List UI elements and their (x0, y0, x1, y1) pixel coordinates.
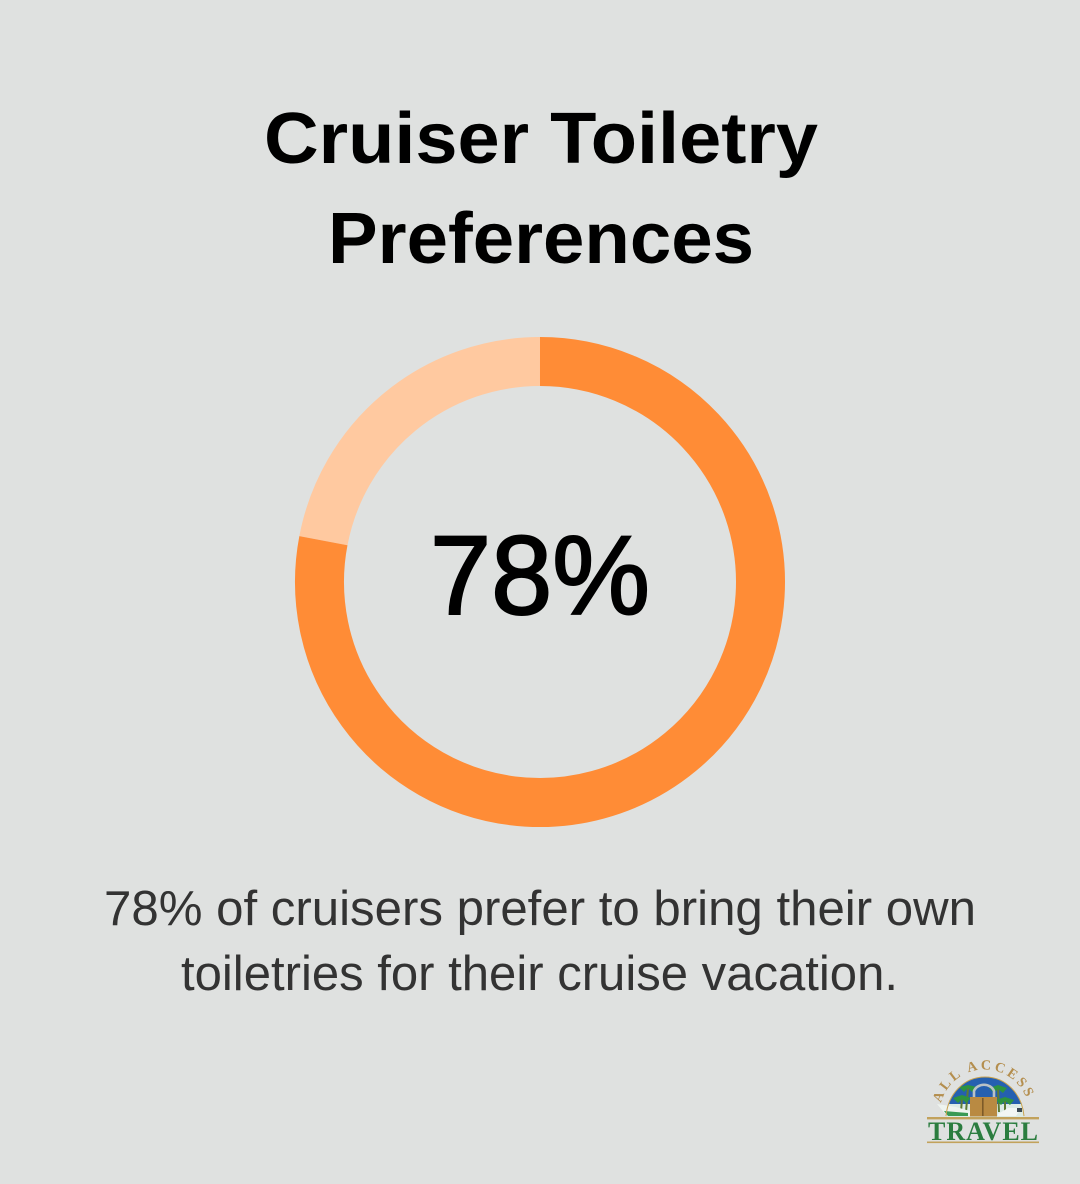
donut value: 78% (430, 513, 650, 638)
78% segment (319, 362, 760, 802)
palm trees (953, 1085, 1014, 1112)
logo dome rim (946, 1077, 1024, 1116)
logo arc text: ALL ACCESS (934, 1060, 1034, 1103)
donut chart: 78% (319, 361, 760, 802)
logo boats (937, 1104, 1022, 1116)
description text: 78% of cruisers prefer to bring their own (104, 882, 976, 936)
logo dome scene (946, 1078, 1024, 1117)
title: Cruiser Toiletry (264, 99, 818, 179)
infographic canvas (106, 110, 1039, 1144)
logo wordmark: TRAVEL (928, 1117, 1038, 1146)
description text (104, 882, 976, 1001)
title (264, 99, 818, 279)
logo rules (927, 1117, 1039, 1143)
remaining 22% segment (323, 361, 540, 541)
title: Preferences (328, 199, 754, 279)
logo: All Access Travel (927, 1060, 1039, 1146)
logo padlock (970, 1085, 997, 1116)
description text: toiletries for their cruise vacation. (181, 947, 898, 1001)
